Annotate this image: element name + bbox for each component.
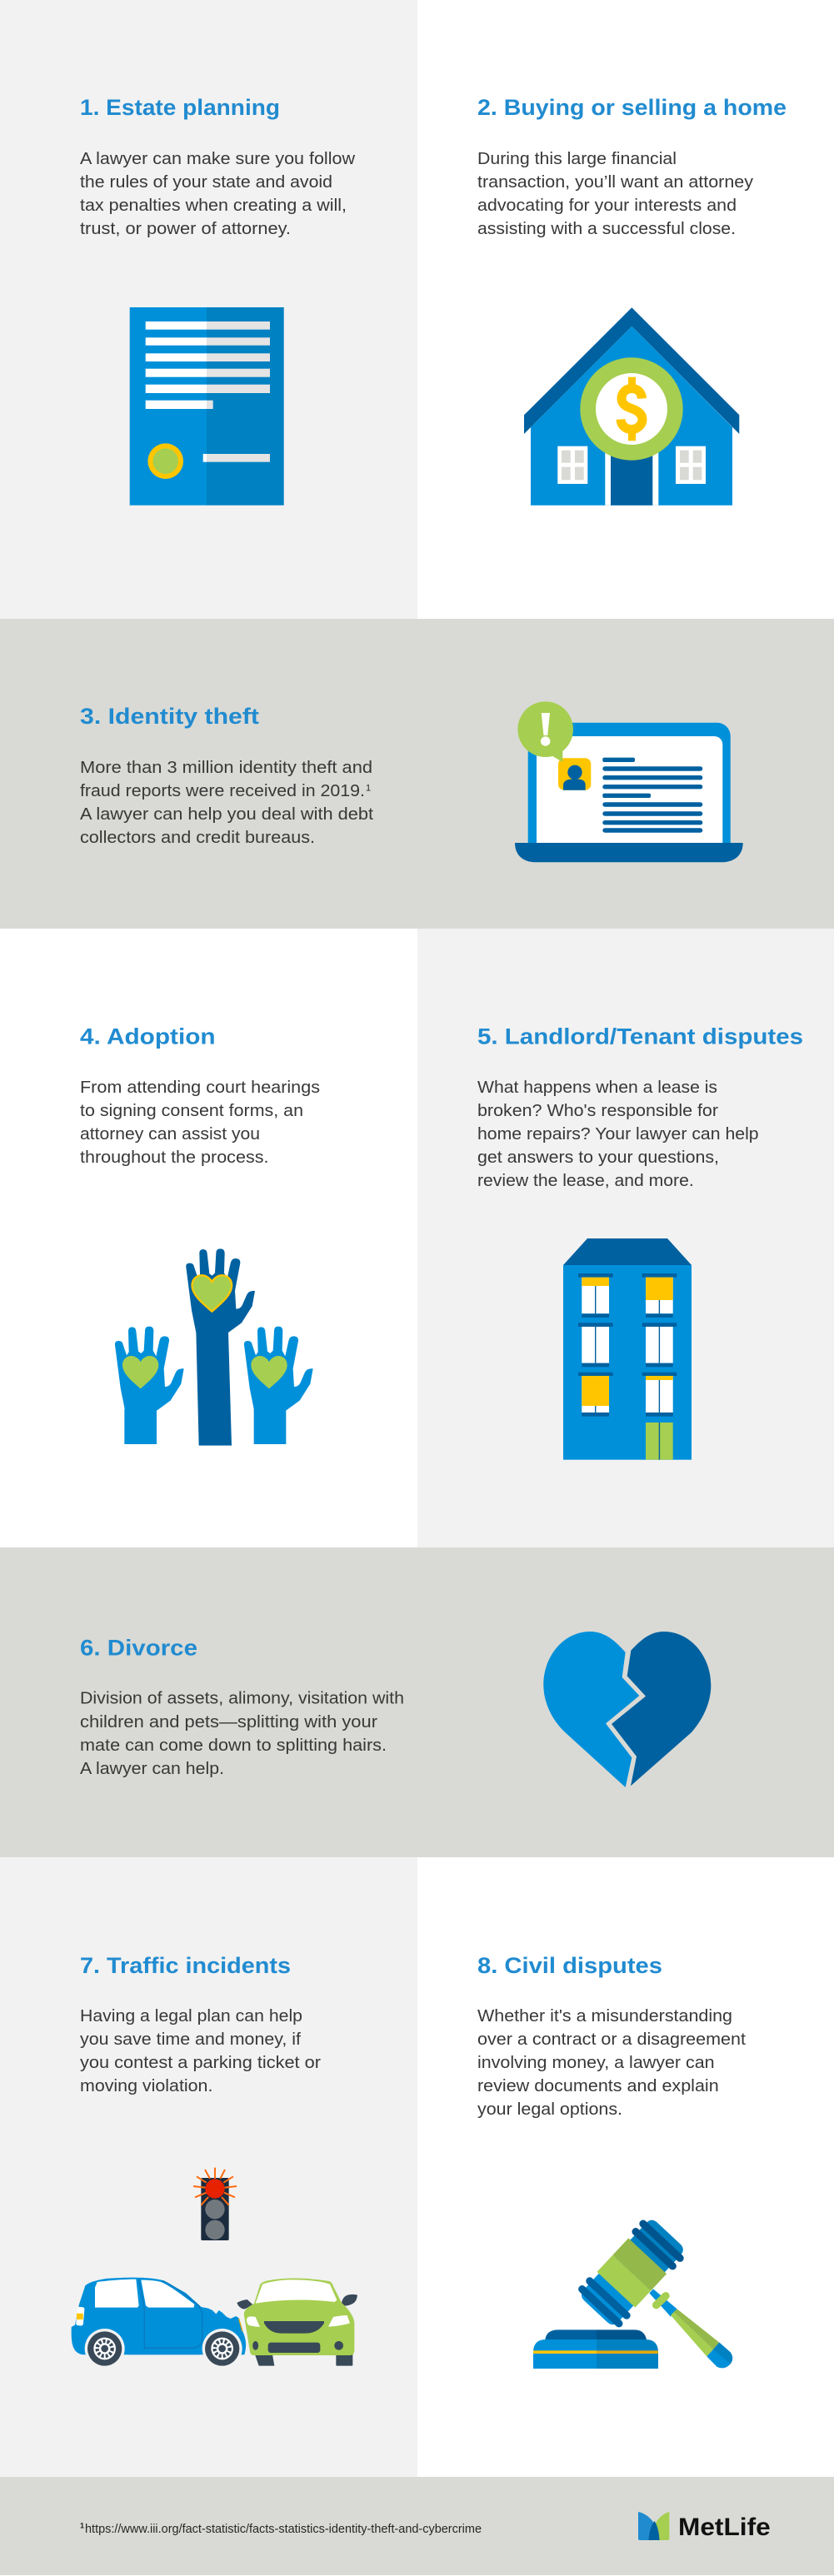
text: buying or selling body: advocating for your interests and — [477, 196, 737, 215]
text: adoption body — [80, 1078, 320, 1167]
panel: 5 landlord tenant disputes — [417, 929, 834, 1547]
text: traffic incidents body: moving violation. — [80, 2076, 212, 2095]
panel: 1 estate planning — [0, 0, 417, 619]
panel: 6 divorce — [0, 1547, 834, 1857]
icon: gavel and sound block — [533, 2215, 732, 2369]
text: traffic incidents body — [80, 2006, 321, 2095]
panel: footer — [0, 2477, 834, 2575]
text: divorce body: Division of assets, alimony, visitation with — [80, 1689, 404, 1707]
icon: broken heart — [543, 1632, 711, 1787]
heading: landlord tenant disputes: 5. Landlord/Tenant disputes — [477, 1024, 803, 1049]
text: landlord tenant body: get answers to your questions, — [477, 1148, 719, 1167]
panel: 2 buying or selling a home — [417, 0, 834, 619]
text: civil disputes body: over a contract or a disagreement — [477, 2030, 746, 2049]
text: identity theft body: collectors and credit bureaus. — [80, 828, 315, 847]
logo: MetLife — [638, 2512, 771, 2541]
text: estate planning body — [80, 149, 355, 238]
text: divorce body: A lawyer can help. — [80, 1759, 224, 1778]
heading: divorce: 6. Divorce — [80, 1636, 197, 1661]
text: civil disputes body — [477, 2006, 746, 2119]
panel: 7 traffic incidents — [0, 1857, 417, 2477]
text: divorce body — [80, 1689, 404, 1778]
blue car — [72, 2278, 246, 2369]
text: landlord tenant body — [477, 1078, 759, 1190]
text: landlord tenant body: What happens when a lease is — [477, 1078, 717, 1097]
footnote: https://www.iii.org/fact-statistic/facts-statistics-identity-theft-and-cybercrime — [85, 2522, 482, 2536]
text: estate planning body: A lawyer can make sure you follow — [80, 149, 355, 168]
text: civil disputes body: your legal options. — [477, 2100, 622, 2119]
text: adoption body: attorney can assist you — [80, 1124, 260, 1144]
text: traffic incidents body: you contest a parking ticket or — [80, 2053, 321, 2072]
text: identity theft body: A lawyer can help you deal with debt — [80, 805, 373, 824]
text: divorce body: children and pets—splitting with your — [80, 1712, 377, 1731]
footnote: 1 — [80, 2522, 84, 2530]
gavel head — [577, 2215, 688, 2329]
icon: apartment building — [563, 1238, 692, 1460]
text: traffic incidents body: Having a legal plan can help — [80, 2006, 302, 2025]
panel: 4 adoption — [0, 929, 417, 1547]
text: adoption body: From attending court hearings — [80, 1078, 320, 1097]
heading: adoption: 4. Adoption — [80, 1024, 216, 1049]
text: identity theft body: fraud reports were received in 2019. — [80, 781, 365, 800]
text: landlord tenant body: broken? Who's responsible for — [477, 1101, 718, 1120]
text: identity theft body: 1 — [366, 783, 371, 793]
text: adoption body: to signing consent forms, an — [80, 1101, 303, 1120]
text: estate planning body: tax penalties when creating a will, — [80, 196, 347, 215]
text: buying or selling body: During this large financial — [477, 149, 677, 168]
traffic light — [193, 2168, 237, 2240]
text: buying or selling body: transaction, you’ll want an attorney — [477, 172, 754, 192]
text: identity theft body: More than 3 million identity theft and — [80, 758, 372, 777]
icon: legal document with seal — [130, 307, 284, 506]
icon: three raised hands with hearts — [115, 1248, 313, 1446]
heading: estate planning: 1. Estate planning — [80, 95, 280, 120]
heading: buying or selling a home: 2. Buying or selling a home — [477, 95, 787, 120]
text: civil disputes body: review documents and explain — [477, 2076, 719, 2095]
text: divorce body: mate can come down to splitting hairs. — [80, 1736, 387, 1755]
text: civil disputes body: Whether it's a misunderstanding — [477, 2006, 732, 2025]
heading: civil disputes: 8. Civil disputes — [477, 1953, 662, 1978]
text: estate planning body: trust, or power of attorney. — [80, 219, 291, 238]
panel: 8 civil disputes — [417, 1857, 834, 2477]
text: adoption body: throughout the process. — [80, 1148, 268, 1167]
text: buying or selling body — [477, 149, 754, 238]
icon: house with dollar sign — [524, 307, 739, 506]
logo: MetLife: MetLife — [678, 2514, 771, 2541]
icon: laptop with identity alert — [515, 701, 743, 862]
text: landlord tenant body: review the lease, and more. — [477, 1171, 694, 1190]
text: landlord tenant body: home repairs? Your lawyer can help — [477, 1124, 759, 1144]
text: estate planning body: the rules of your state and avoid — [80, 172, 332, 192]
icon: traffic light and car collision — [72, 2168, 357, 2369]
sound block — [533, 2329, 658, 2369]
text: traffic incidents body: you save time and money, if — [80, 2030, 301, 2049]
text: identity theft body — [80, 758, 373, 847]
heading: traffic incidents: 7. Traffic incidents — [80, 1953, 291, 1978]
heading: identity theft: 3. Identity theft — [80, 704, 259, 729]
green car — [237, 2279, 357, 2366]
text: buying or selling body: assisting with a successful close. — [477, 219, 736, 238]
handle — [649, 2289, 732, 2368]
text: civil disputes body: involving money, a lawyer can — [477, 2053, 715, 2072]
panel: 3 identity theft — [0, 619, 834, 929]
